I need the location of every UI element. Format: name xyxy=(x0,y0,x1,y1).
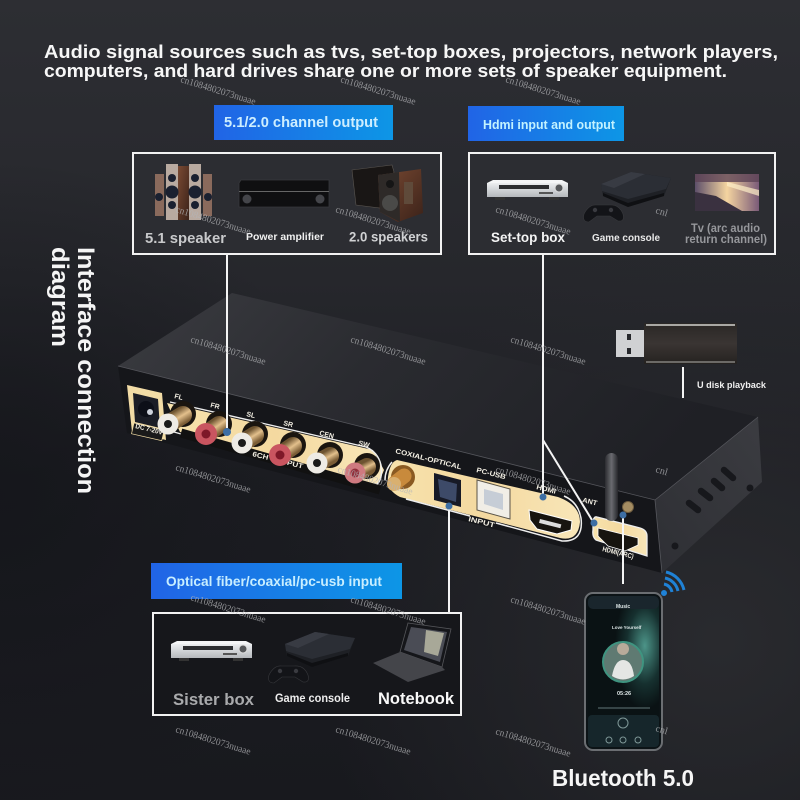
RCA connector FL xyxy=(158,401,196,434)
heading: interface connection diagram xyxy=(46,247,99,494)
device front face xyxy=(118,366,662,573)
RCA connector SW xyxy=(344,453,380,484)
6CH output gold panel xyxy=(167,402,384,490)
caption: game console: Game console xyxy=(275,693,350,705)
icon: power amplifier xyxy=(239,180,329,207)
HDMI ARC panel xyxy=(593,517,647,561)
icon: television xyxy=(695,174,759,211)
player controls xyxy=(598,708,650,743)
channel labels: FR xyxy=(210,402,220,411)
phone xyxy=(585,593,662,750)
coaxial connector xyxy=(387,465,415,491)
label: HDMI input and output xyxy=(468,106,624,141)
phone track title: Music xyxy=(616,604,630,610)
watermarks: cn1084802073nuaae xyxy=(494,464,572,498)
input labels: COXIAL-OPTICAL xyxy=(395,448,463,472)
watermarks: cn1084802073nuaae xyxy=(189,334,267,368)
label: optical fiber input xyxy=(151,563,402,599)
icon: 2.0 speakers xyxy=(352,165,423,222)
watermarks: cn1084802073nuaae xyxy=(509,594,587,628)
channel labels: SL xyxy=(246,411,257,420)
watermarks: cnl xyxy=(654,464,669,479)
watermarks: cn1084802073nuaae xyxy=(174,462,252,496)
panel: speaker outputs xyxy=(133,153,441,254)
heading: interface connection diagram: Interface connection xyxy=(72,247,99,494)
watermarks: cn1084802073nuaae xyxy=(494,726,572,760)
label: HDMI input and output: Hdmi input and output xyxy=(483,117,616,132)
watermarks: cn1084802073nuaae xyxy=(334,204,412,238)
phone track title: 05:26 xyxy=(617,691,631,697)
RCA connector SR xyxy=(269,432,306,466)
label: 5.1/2.0 channel output xyxy=(214,105,393,140)
icon: USB flash drive xyxy=(616,323,737,364)
caption: TV: Tv (arc audio xyxy=(691,223,760,235)
phone track title xyxy=(612,604,642,697)
HDMI ARC panel: HDMI(ARC) xyxy=(602,546,634,561)
watermarks: cn1084802073nuaae xyxy=(504,74,582,108)
icon: 5.1 speakers xyxy=(155,164,212,220)
input labels: PC-USB xyxy=(476,467,506,481)
input labels: INPUT xyxy=(468,516,496,530)
6CH output gold panel: 6CH OUTPUT xyxy=(252,451,304,471)
caption: TV: return channel) xyxy=(685,234,767,246)
icon: set-top box xyxy=(487,180,568,200)
watermarks: cn1084802073nuaae xyxy=(509,334,587,368)
input labels: ANT xyxy=(582,497,598,508)
input labels xyxy=(395,448,598,530)
title: computers, and hard drives share one or more sets of speaker equipment. xyxy=(44,61,727,81)
watermarks: cnl xyxy=(654,205,669,220)
input labels: HDMI xyxy=(536,484,557,496)
title xyxy=(44,42,778,81)
watermarks: cn1084802073nuaae xyxy=(189,592,267,626)
icon: bluetooth signal xyxy=(662,572,684,594)
USB port xyxy=(477,480,510,519)
caption: sister box: Sister box xyxy=(173,690,255,709)
caption: notebook: Notebook xyxy=(378,689,455,708)
channel labels: SW xyxy=(358,440,371,450)
channel labels xyxy=(174,393,371,450)
HDMI port xyxy=(529,510,572,534)
watermarks xyxy=(174,74,669,760)
caption: 2.0 speakers: 2.0 speakers xyxy=(349,230,428,244)
optical port xyxy=(434,473,461,507)
DC power panel: DC 7-20V xyxy=(135,423,164,437)
channel labels: FL xyxy=(174,393,184,402)
icon: game console xyxy=(584,172,671,222)
watermarks: cn1084802073nuaae xyxy=(336,464,414,498)
watermarks: cn1084802073nuaae xyxy=(494,204,572,238)
heading: interface connection diagram: diagram xyxy=(46,247,73,347)
watermarks: cn1084802073nuaae xyxy=(339,74,417,108)
RCA connector FR xyxy=(195,411,232,445)
caption: game console: Game console xyxy=(592,232,660,244)
DC power panel xyxy=(127,385,166,441)
panel: HDMI devices xyxy=(469,153,775,254)
RCA connector CEN xyxy=(306,442,343,474)
phone track title: Love Yourself xyxy=(612,625,642,630)
RCA connector SL xyxy=(232,421,268,454)
watermarks: cn1084802073nuaae xyxy=(174,204,252,238)
caption: 5.1 speaker: 5.1 speaker xyxy=(145,231,226,247)
caption: U disk playback: U disk playback xyxy=(697,380,767,391)
channel labels: CEN xyxy=(319,430,335,441)
watermarks: cn1084802073nuaae xyxy=(174,724,252,758)
panel: input devices xyxy=(153,613,461,715)
phone screen xyxy=(588,596,659,747)
icon: game console xyxy=(269,632,355,683)
watermarks: cn1084802073nuaae xyxy=(349,334,427,368)
device right face xyxy=(655,417,762,573)
label: optical fiber input: Optical fiber/coaxial/pc-usb input xyxy=(166,574,382,589)
caption: Bluetooth 5.0: Bluetooth 5.0 xyxy=(552,765,694,791)
antenna xyxy=(605,453,634,521)
connector lines xyxy=(227,255,683,612)
channel labels: SR xyxy=(283,420,294,429)
album art xyxy=(603,642,643,682)
caption: set-top box: Set-top box xyxy=(491,230,565,245)
watermarks: cnl xyxy=(654,723,669,738)
watermarks: cn1084802073nuaae xyxy=(334,724,412,758)
caption: TV xyxy=(685,223,767,246)
device: audio decoder box xyxy=(118,293,762,573)
watermarks: cn1084802073nuaae xyxy=(349,594,427,628)
title: Audio signal sources such as tvs, set-top boxes, projectors, network players, xyxy=(44,42,778,62)
icon: sister box xyxy=(171,641,252,661)
input gold panel xyxy=(385,460,581,541)
connection dots xyxy=(223,428,626,526)
watermarks: cn1084802073nuaae xyxy=(179,74,257,108)
label: 5.1/2.0 channel output: 5.1/2.0 channel output xyxy=(224,115,378,131)
icon: notebook xyxy=(373,623,451,682)
caption: power amplifier: Power amplifier xyxy=(246,231,324,243)
device top face xyxy=(118,293,758,500)
